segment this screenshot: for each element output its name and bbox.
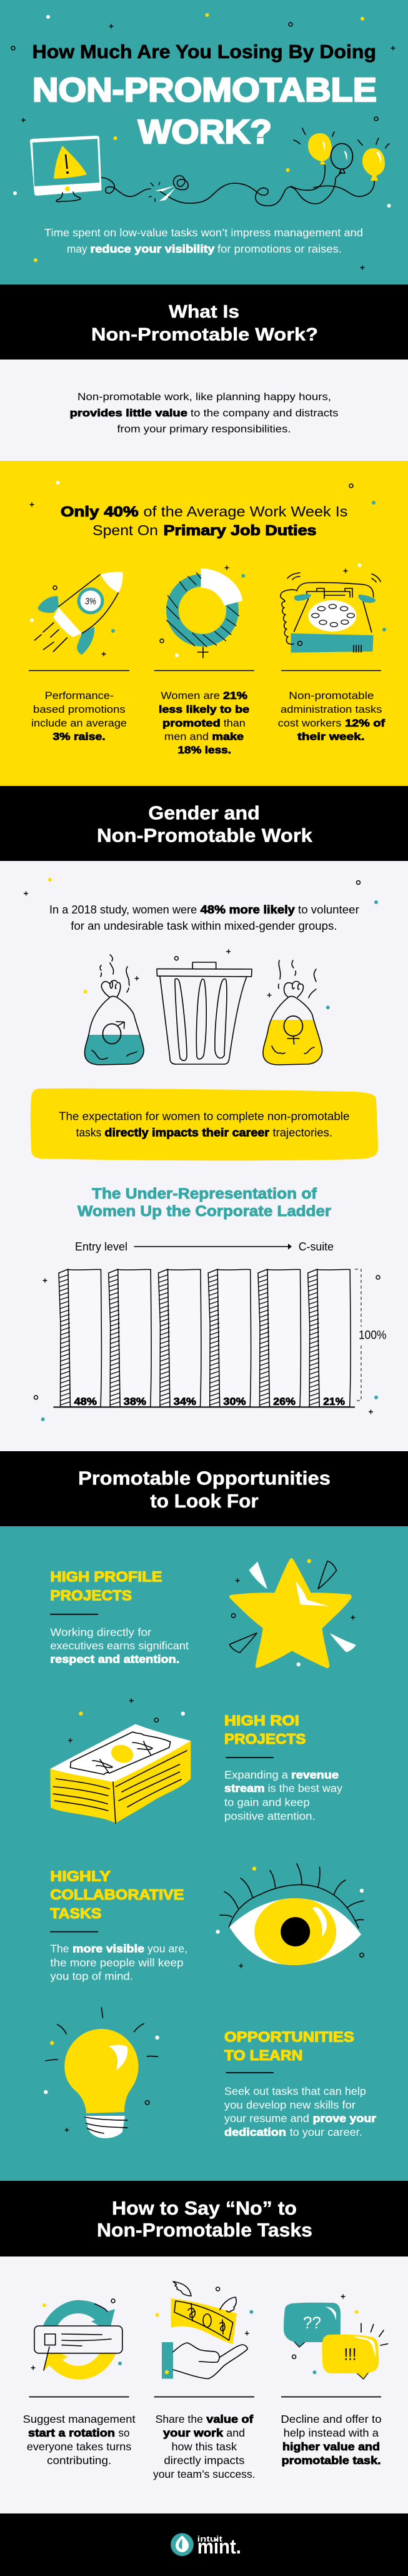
heading: gender and non-promotable work: [97, 802, 313, 847]
opportunity: highly collaborative tasks: COLLABORATIVE: [50, 1886, 184, 1903]
hero subtitle: for promotions or raises.: [217, 243, 342, 255]
heading: promotable opportunities: Promotable Opportunities: [78, 1467, 331, 1489]
opportunity: highly collaborative tasks: more visible: [72, 1942, 144, 1955]
statistic: promotions raise: [29, 670, 129, 743]
icon: rocket 3%: [30, 572, 123, 657]
heading: gender and non-promotable work: Gender and: [148, 802, 260, 824]
icon: winged money over hand: [156, 2282, 253, 2378]
say-no tip: decline and offer: help instead with a: [284, 2427, 379, 2439]
opportunity: highly collaborative tasks: HIGHLY: [50, 1868, 111, 1884]
chart axis: entry level to c-suite: [75, 1240, 334, 1253]
opportunity: high roi projects: stream: [224, 1782, 265, 1794]
footer logo: intuit mint: [171, 2533, 241, 2558]
callout: career trajectories: trajectories.: [272, 1127, 332, 1139]
statistic: women less likely promoted: less likely to be: [159, 703, 249, 715]
icon: monitor with warning: [30, 136, 101, 202]
opportunity: high profile projects: Working directly for: [50, 1626, 152, 1638]
chart heading: The Under-Representation of: [92, 1185, 317, 1202]
opportunity: opportunities to learn: dedication: [224, 2126, 286, 2138]
statistic: women less likely promoted: promoted: [162, 717, 221, 729]
background: gender heading band: [0, 786, 408, 861]
statistic: admin tasks cost: 12% of: [345, 717, 385, 729]
hero title: NON-PROMOTABLE: [32, 71, 377, 109]
statistic: promotions raise: Performance-: [45, 690, 114, 702]
background: say-no heading band: [0, 2181, 408, 2257]
statistics heading: Spent On: [92, 522, 158, 538]
opportunity: opportunities to learn: prove your: [313, 2112, 376, 2125]
opportunity: high roi projects: PROJECTS: [224, 1731, 306, 1747]
chart heading: Women Up the Corporate Ladder: [77, 1203, 331, 1220]
statistics heading: Primary Job Duties: [164, 522, 316, 538]
say-no tip: decline and offer: higher value and: [282, 2440, 380, 2453]
hero title: WORK?: [138, 113, 272, 151]
say-no tip: decline and offer: Decline and offer to: [281, 2413, 382, 2425]
bar chart: women representation by level: 48%: [74, 1396, 97, 1407]
bar chart: women representation by level: 30%: [223, 1396, 246, 1407]
bar chart: women representation by level: 34%: [174, 1396, 196, 1407]
chart heading: [77, 1185, 331, 1220]
study text: In a 2018 study, women were: [49, 903, 197, 916]
opportunity: highly collaborative tasks: [50, 1868, 187, 1983]
statistic: women less likely promoted: [154, 670, 254, 756]
opportunity: high roi projects: [224, 1712, 342, 1822]
background: opportunities heading band: [0, 1451, 408, 1526]
opportunity: highly collaborative tasks: TASKS: [50, 1905, 101, 1921]
say-no tip: start a rotation: everyone takes turns: [27, 2440, 132, 2453]
definition text: provides little value: [70, 407, 187, 419]
heading: how to say no: Non-Promotable Tasks: [97, 2219, 312, 2241]
callout: career trajectories: [31, 1089, 378, 1160]
hero subtitle: [44, 226, 363, 255]
statistic: promotions raise: 3% raise.: [52, 730, 106, 743]
definition text: [70, 391, 338, 435]
bar chart: women representation by level: [53, 1269, 387, 1407]
opportunity: highly collaborative tasks: you are,: [147, 1942, 187, 1955]
opportunity: opportunities to learn: you develop new skills for: [224, 2098, 356, 2111]
say-no tip: start a rotation: so: [119, 2427, 129, 2439]
footer logo: intuit mint: mint.: [197, 2535, 241, 2558]
opportunity: highly collaborative tasks: the more people will keep: [50, 1956, 184, 1969]
background: footer band: [0, 2513, 408, 2576]
icon: rotation arrows with card: [31, 2299, 122, 2380]
say-no tip: share the value: your work: [163, 2427, 223, 2439]
say-no tip: share the value: how this task: [171, 2440, 237, 2453]
say-no tip: share the value: and: [226, 2427, 245, 2439]
icon: trash can: [157, 962, 252, 1064]
say-no tip: decline and offer: promotable task.: [282, 2454, 381, 2467]
icon: star: [229, 1558, 356, 1668]
statistic: women less likely promoted: men and: [164, 730, 209, 743]
say-no tip: share the value: your team’s success.: [153, 2468, 256, 2480]
statistics heading: of the Average Work Week Is: [144, 503, 347, 520]
background: what-is heading band: [0, 284, 408, 360]
icon: cut cable and scissors: [101, 164, 374, 206]
chart axis: entry level to c-suite: C-suite: [299, 1240, 334, 1253]
background: say-no panel: [0, 2257, 408, 2513]
opportunity: opportunities to learn: TO LEARN: [224, 2047, 302, 2063]
opportunity: opportunities to learn: [224, 2028, 376, 2138]
statistic: women less likely promoted: make: [212, 730, 244, 743]
statistic: admin tasks cost: [278, 670, 385, 743]
background: definition panel: [0, 360, 408, 461]
hero title: How Much Are You Losing By Doing: [32, 41, 376, 63]
chart axis: entry level to c-suite: Entry level: [75, 1240, 127, 1253]
opportunity: highly collaborative tasks: The: [50, 1942, 69, 1955]
definition text: to the company and distracts: [191, 407, 339, 419]
opportunity: highly collaborative tasks: you top of mind.: [50, 1970, 133, 1983]
hero subtitle: reduce your visibility: [90, 243, 215, 255]
icon: speech bubbles: !!!: [344, 2345, 356, 2364]
trash icon scattered dots: [84, 949, 330, 1009]
icon: speech bubbles: [284, 2295, 388, 2379]
statistic: women less likely promoted: than: [224, 717, 246, 729]
opportunity: high roi projects: HIGH ROI: [224, 1712, 299, 1728]
callout: career trajectories: directly impacts their career: [104, 1127, 269, 1139]
hero scattered dots: [11, 13, 395, 270]
heading: promotable opportunities: [78, 1467, 331, 1512]
icon: female donut chart: [160, 565, 245, 658]
opportunity: high roi projects: positive attention.: [224, 1809, 316, 1822]
study text: to volunteer: [298, 903, 359, 916]
opportunity: high profile projects: [50, 1568, 189, 1666]
opportunity: high profile projects: PROJECTS: [50, 1587, 132, 1603]
definition text: Non-promotable work, like planning happy hours,: [77, 391, 331, 403]
opportunity: high profile projects: respect and attention.: [50, 1653, 179, 1666]
say-no tip: share the value: directly impacts: [164, 2454, 245, 2467]
opportunity: opportunities to learn: Seek out tasks that can help: [224, 2085, 366, 2097]
icon: stack of money: [50, 1698, 191, 1823]
icon: eye: [216, 1864, 364, 1968]
study text: 48% more likely: [201, 903, 295, 916]
statistics scattered dots: [30, 481, 376, 506]
heading: what is non-promotable work: Non-Promotable Work?: [91, 325, 318, 345]
statistic: admin tasks cost: administration tasks: [281, 703, 382, 715]
icon: rotary telephone: [281, 563, 386, 653]
say-no tip: start a rotation: [23, 2397, 136, 2467]
background: hero panel: [0, 0, 408, 284]
say-no tip: start a rotation: start a rotation: [28, 2427, 115, 2439]
callout: career trajectories: The expectation for women to complete non-promotable: [59, 1110, 349, 1123]
bar chart: women representation by level: 100%: [359, 1329, 387, 1342]
say-no tip: start a rotation: contributing.: [47, 2454, 111, 2467]
statistic: admin tasks cost: Non-promotable: [289, 690, 374, 702]
say-no tip: start a rotation: Suggest management: [23, 2413, 136, 2425]
hero title: [32, 41, 377, 151]
heading: what is non-promotable work: What Is: [169, 302, 239, 322]
say-no tip: share the value: [153, 2397, 256, 2480]
footer logo: intuit mint: intuit: [197, 2534, 223, 2543]
heading: how to say no: How to Say “No” to: [112, 2197, 297, 2219]
bar chart: women representation by level: 38%: [124, 1396, 146, 1407]
statistic: women less likely promoted: Women are: [161, 690, 220, 702]
statistic: promotions raise: based promotions: [33, 703, 126, 715]
icon: light bulb: [44, 2008, 159, 2138]
statistic: admin tasks cost: their week.: [297, 730, 365, 743]
opportunity: high roi projects: Expanding a: [224, 1768, 288, 1781]
heading: gender and non-promotable work: Non-Promotable Work: [97, 824, 313, 847]
icon: balloons: [294, 128, 389, 181]
heading: what is non-promotable work: [91, 302, 318, 345]
icon: speech bubbles: ??: [303, 2313, 321, 2332]
icon: rocket 3%: 3%: [85, 596, 96, 606]
study text: [49, 903, 359, 932]
say-no tip: decline and offer: [281, 2397, 382, 2467]
say-no tip: share the value: Share the: [156, 2413, 203, 2425]
statistics heading: [61, 503, 347, 538]
gender panel scattered dots: [24, 878, 378, 904]
background: gender panel: [0, 861, 408, 1451]
opportunity: high profile projects: executives earns significant: [50, 1639, 189, 1652]
icon: male garbage bag: [84, 955, 144, 1065]
opportunity: high roi projects: is the best way: [268, 1782, 342, 1794]
opportunity: opportunities to learn: your resume and: [224, 2112, 309, 2125]
bar chart: women representation by level: 26%: [273, 1396, 296, 1407]
statistic: promotions raise: include an average: [31, 717, 127, 729]
heading: promotable opportunities: to Look For: [150, 1490, 259, 1512]
chart scattered dots: [34, 1275, 380, 1421]
study text: for an undesirable task within mixed-gender groups.: [71, 920, 337, 932]
callout: career trajectories: tasks: [76, 1127, 101, 1139]
heading: how to say no: [97, 2197, 312, 2241]
opportunity: high roi projects: revenue: [291, 1768, 339, 1781]
icon: female garbage bag: [263, 960, 322, 1065]
statistic: women less likely promoted: 21%: [223, 690, 247, 702]
say-no tip: share the value: value of: [206, 2413, 253, 2425]
opportunity: high profile projects: HIGH PROFILE: [50, 1568, 162, 1584]
statistic: women less likely promoted: 18% less.: [177, 744, 231, 756]
statistics heading: Only 40%: [61, 503, 139, 520]
opportunity: opportunities to learn: to your career.: [290, 2126, 362, 2138]
opportunity: opportunities to learn: OPPORTUNITIES: [224, 2028, 354, 2045]
definition text: from your primary responsibilities.: [117, 423, 291, 435]
hero subtitle: Time spent on low-value tasks won’t impress management and: [44, 226, 363, 239]
background: opportunities panel: [0, 1526, 408, 2181]
hero subtitle: may: [67, 243, 87, 255]
bar chart: women representation by level: 21%: [323, 1396, 345, 1407]
statistic: admin tasks cost: cost workers: [278, 717, 341, 729]
opportunity: high roi projects: to gain and keep: [224, 1796, 310, 1809]
background: statistics panel: [0, 461, 408, 786]
